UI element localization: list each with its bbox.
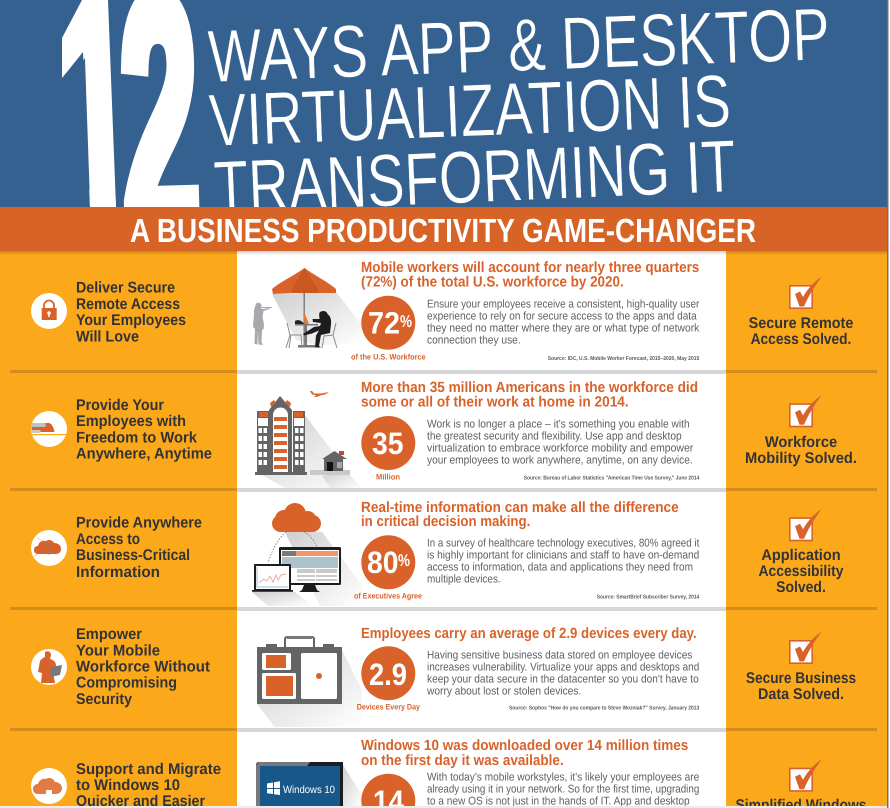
row 1 headline: (72%) of the total U.S. workforce by 2020. (361, 275, 624, 291)
stat circle 80%: % (398, 551, 410, 570)
row 3 solved badge: Solved. (776, 579, 826, 596)
stat circle 2.9: Devices Every Day (357, 703, 420, 712)
row 2 body text: your employees to work anywhere, anytime, on any device. (427, 455, 693, 467)
row 4 body text: worry about lost or stolen devices. (426, 686, 581, 698)
stat circle 80%: of Executives Agree (354, 592, 422, 601)
row 4 heading: Security (76, 691, 132, 708)
row 2 headline (361, 380, 698, 411)
title text: TRANSFORMING IT (212, 124, 737, 229)
row 4 heading (76, 626, 210, 708)
row 5 heading: to Windows 10 (76, 777, 180, 794)
stat circle 72% (351, 296, 426, 362)
stat circle 2.9 (357, 646, 420, 712)
row 4 solved badge: Data Solved. (758, 686, 844, 703)
illustration: office tower, house and plane (255, 391, 362, 488)
row 2 heading: Provide Your (76, 397, 164, 414)
row divider (10, 607, 877, 611)
row 2 heading: Employees with (76, 413, 186, 430)
right edge strip (887, 0, 890, 808)
row 4 heading: Compromising (76, 675, 177, 692)
stat circle 35: 35 (372, 426, 404, 461)
row 2 solved badge: Workforce (765, 434, 838, 451)
row 1 body text: they need no matter where they are or what type of network (427, 322, 700, 334)
row 5 headline (361, 738, 688, 769)
row 3 body text: is highly important for clinicians and staff to have on-demand (427, 550, 699, 562)
row 3 heading: Business-Critical (76, 547, 190, 564)
row divider (10, 728, 877, 732)
row 1 solved badge (749, 277, 854, 348)
row 1 heading: Remote Access (76, 296, 180, 313)
row 2 body text: virtualization to embrace workforce mobility and empower (427, 443, 694, 455)
row 1 body text: experience to rely on for secure access to the apps and data (427, 310, 697, 322)
row 3 solved badge (758, 509, 844, 596)
illustration: cloud, monitor and laptop (252, 503, 362, 606)
row 3 heading (76, 515, 202, 581)
stat circle 72%: 72 (368, 306, 400, 340)
stat circle 80%: 80 (367, 545, 398, 580)
row 4 heading: Empower (76, 626, 142, 643)
row 1 heading (76, 280, 186, 346)
row 2 heading (76, 397, 212, 463)
row 5 heading: Support and Migrate (76, 761, 221, 778)
row 1 heading: Your Employees (76, 312, 186, 329)
row 4: secure business data (31, 626, 856, 727)
row 5: simplified windows migration (31, 738, 866, 808)
row 2 headline: More than 35 million Americans in the workforce did (361, 380, 698, 396)
icon: cloud download (31, 768, 67, 804)
illustration: briefcase with devices (257, 636, 362, 727)
title text: VIRTUALIZATION IS (207, 59, 732, 162)
row 2 source: Source: Bureau of Labor Statistics "American Time Use Survey," June 2014 (524, 475, 700, 482)
row 2 heading: Anywhere, Anytime (76, 446, 212, 463)
row divider (10, 488, 877, 492)
stat circle 80% (354, 535, 422, 601)
row 5 body text: With today's mobile workstyles, it's likely your employees are (427, 772, 699, 784)
row 1 source: Source: IDC, U.S. Mobile Worker Forecast, 2015–2020, May 2015 (548, 355, 699, 362)
row 3 heading: Information (76, 564, 160, 581)
row 4 solved badge (746, 632, 856, 703)
row 5 heading (76, 761, 221, 808)
subtitle banner: A BUSINESS PRODUCTIVITY GAME-CHANGER (130, 213, 756, 250)
row 5 body text: already using it in your network. So for the first time, upgrading (427, 784, 699, 796)
row 1 body text: connection they use. (427, 334, 521, 346)
row 2 body text: Work is no longer a place – it's something you enable with (427, 419, 690, 431)
row 3 headline (361, 500, 679, 530)
row 2 body text (427, 419, 694, 467)
row 3 heading: Access to (76, 531, 140, 548)
row 4 body text: keep your data secure in the datacenter so you don't have to (427, 674, 699, 686)
row divider (10, 370, 877, 374)
row 2 heading: Freedom to Work (76, 430, 197, 447)
row 2 headline: some or all of their work at home in 2014. (361, 395, 629, 411)
row 5 body text (427, 772, 699, 808)
row 1 heading: Deliver Secure (76, 280, 175, 297)
illustration: Windows 10 tablet (256, 762, 362, 808)
row 4 body text: increases vulnerability. Virtualize your apps and desktops and (427, 662, 699, 674)
row 5 body text: to a new OS is not just in the hands of IT. App and desktop (427, 796, 690, 808)
row 1 body text: Ensure your employees receive a consistent, high-quality user (427, 298, 700, 310)
row 2 solved badge: Mobility Solved. (745, 450, 857, 467)
row 1 solved badge: Access Solved. (751, 331, 851, 348)
header panel (0, 0, 887, 207)
bottom edge strip (0, 806, 890, 808)
row 2 body text: the greatest security and flexibility. Use app and desktop (427, 431, 682, 443)
row 1 heading: Will Love (76, 329, 139, 346)
row 3 solved badge: Application (761, 547, 841, 564)
row 3 headline: in critical decision making. (361, 514, 530, 530)
stat circle 72%: % (400, 312, 412, 331)
row 2: workforce mobility (31, 380, 857, 488)
title text (207, 9, 826, 207)
row 1 solved badge: Secure Remote (749, 315, 854, 332)
row 3 body text (427, 538, 700, 586)
stat circle 72%: of the U.S. Workforce (351, 353, 426, 362)
row 3 heading: Provide Anywhere (76, 515, 202, 532)
icon: train (31, 411, 68, 447)
row 3 solved badge: Accessibility (758, 563, 844, 580)
row 4 body text: Having sensitive business data stored on employee devices (427, 650, 693, 662)
title numeral 12 (62, 0, 200, 207)
icon: lock (31, 293, 67, 329)
row 2 solved badge (745, 395, 857, 467)
row 5 headline: on the first day it was available. (361, 753, 564, 769)
row 4 headline: Employees carry an average of 2.9 devices every day. (361, 626, 697, 642)
stat circle 35: Million (376, 473, 400, 482)
row 3 headline: Real-time information can make all the difference (361, 500, 679, 516)
row 4 body text (426, 650, 699, 698)
row 1: secure remote access (31, 260, 854, 362)
stat circle 35 (361, 416, 415, 482)
row 5 headline: Windows 10 was downloaded over 14 million times (361, 738, 688, 754)
row 4 source: Source: Sophos "How do you compare to Steve Wozniak?" Survey, January 2013 (509, 705, 699, 712)
row 1 headline (361, 260, 699, 291)
stat circle 2.9: 2.9 (369, 657, 407, 692)
row 3 body text: multiple devices. (427, 574, 501, 586)
row 1 headline: Mobile workers will account for nearly three quarters (361, 260, 699, 276)
row 5 solved badge (736, 759, 866, 808)
row 3 source: Source: SmartBrief Subscriber Survey, 2014 (597, 594, 700, 601)
illustration: worker at cafe table under umbrella (253, 268, 362, 348)
row 4 heading: Your Mobile (76, 643, 160, 660)
row 4 solved badge: Secure Business (746, 670, 856, 687)
icon: network cloud (31, 530, 67, 566)
row 3 body text: access to information, data and applications they need from (427, 562, 693, 574)
icon: mobile worker (31, 649, 67, 685)
row 3: application accessibility (31, 500, 844, 606)
stat circle 14 (361, 774, 415, 808)
row 3 body text: In a survey of healthcare technology executives, 80% agreed it (427, 538, 700, 550)
row 4 heading: Workforce Without (76, 659, 210, 676)
center white column (237, 251, 726, 808)
row 1 body text (427, 298, 700, 346)
illustration: Windows 10 tablet: Windows 10 (283, 784, 335, 796)
